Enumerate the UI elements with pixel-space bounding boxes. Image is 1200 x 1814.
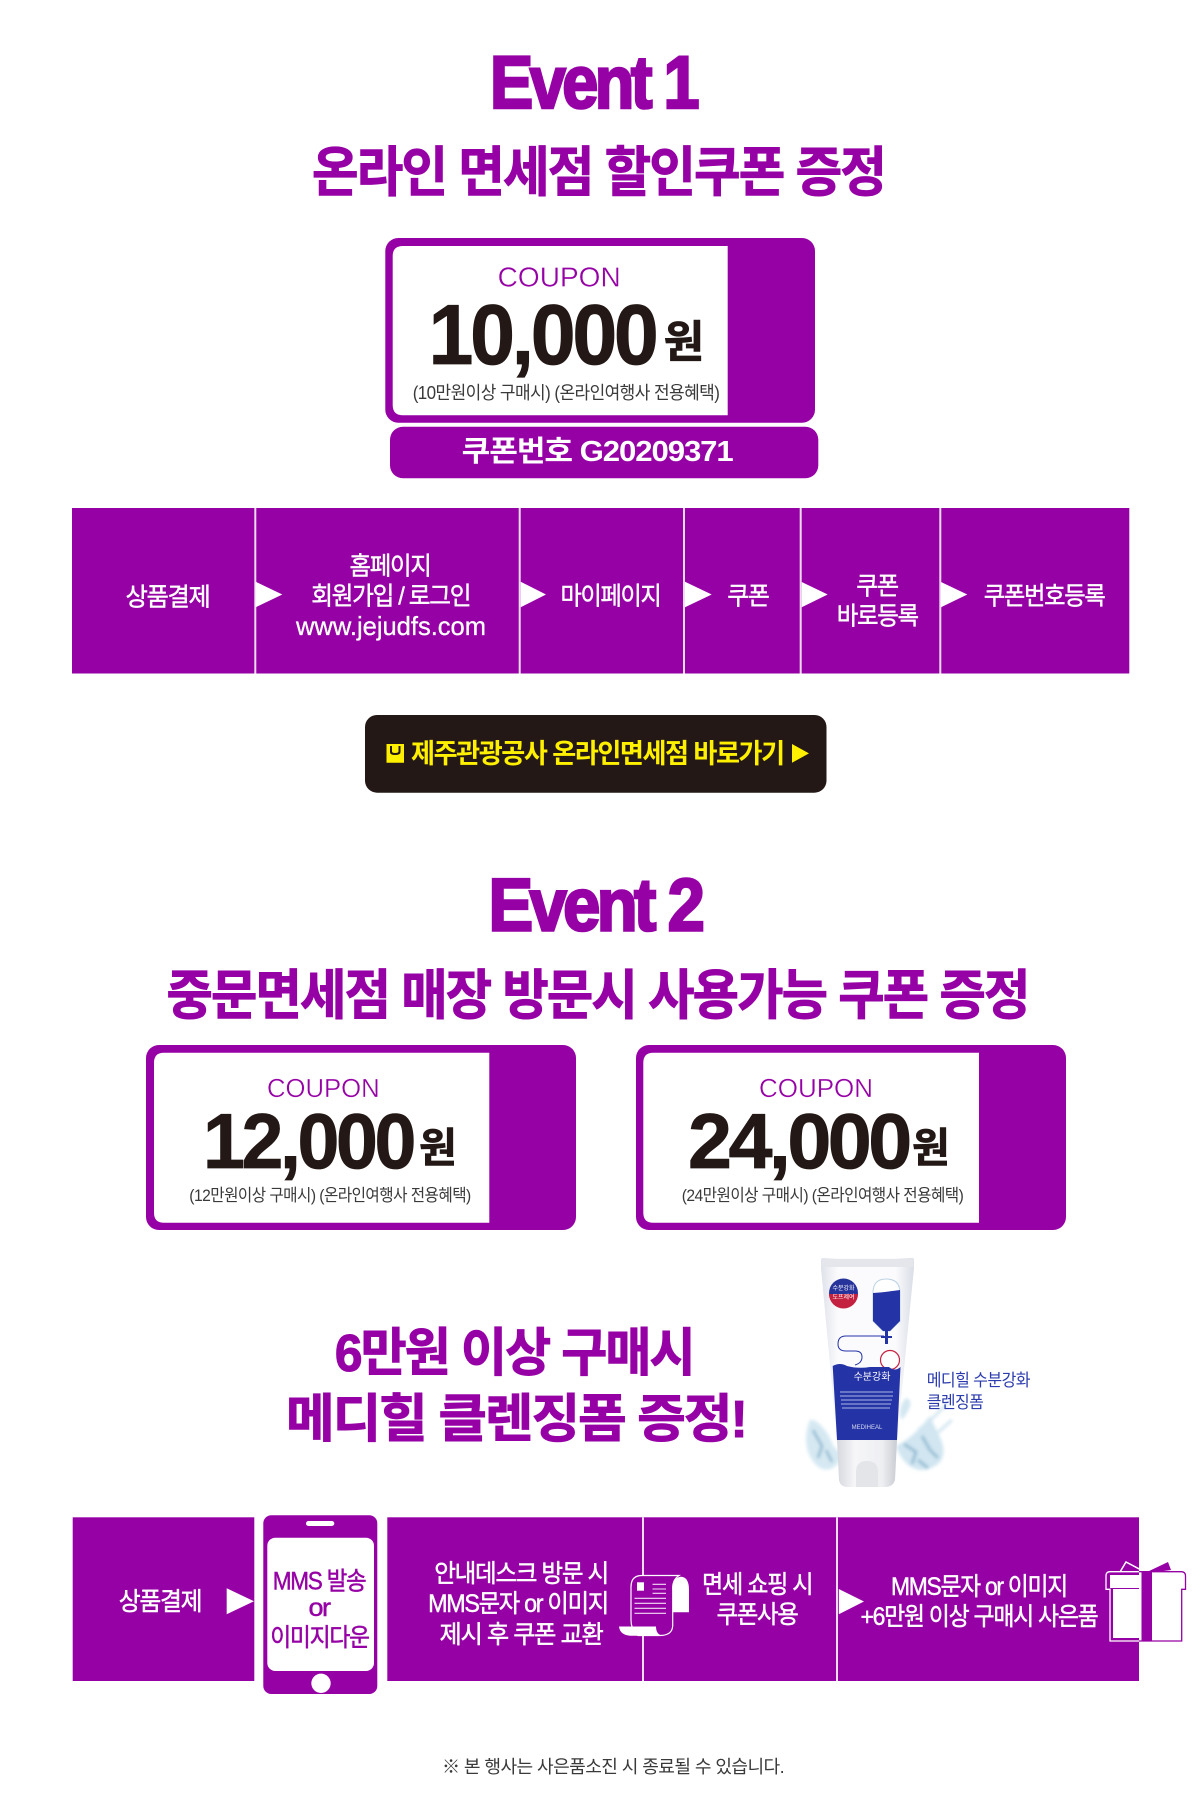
- icon: gift box: [1106, 1562, 1186, 1641]
- step panels: help desk, shopping, gift: [387, 1517, 1139, 1681]
- won unit: 원: [664, 318, 704, 367]
- step: shopping text: 면세 쇼핑 시: [702, 1571, 812, 1599]
- footnote: ※ 본 행사는 사은품소진 시 종료될 수 있습니다.: [442, 1757, 784, 1777]
- step: homepage login: 회원가입 / 로그인: [311, 582, 470, 610]
- arrow: [941, 582, 967, 607]
- coupon condition: (12만원이상 구매시) (온라인여행사 전용혜택): [189, 1186, 471, 1205]
- coupon amount: 12,000: [203, 1097, 414, 1185]
- step panel: payment: [73, 1517, 254, 1681]
- tube body: [821, 1258, 914, 1440]
- step: direct registration: 쿠폰: [856, 572, 898, 600]
- icon: phone with MMS: or: [308, 1594, 331, 1622]
- step: shopping text: 쿠폰사용: [716, 1601, 798, 1629]
- panel: 24,000 won coupon: [636, 1045, 1066, 1230]
- icon: play arrow: [792, 744, 809, 763]
- step: coupon: 쿠폰: [727, 582, 769, 610]
- step: gift text: [860, 1573, 1098, 1631]
- coupon label: COUPON: [759, 1073, 873, 1103]
- step: direct registration: 바로등록: [837, 602, 918, 630]
- step: gift text: MMS문자 or 이미지: [891, 1573, 1067, 1601]
- water splash: [806, 1398, 952, 1470]
- step: homepage login: 홈페이지: [350, 552, 430, 580]
- step panel: payment: 상품결제: [119, 1588, 201, 1616]
- heading: Jungmun store coupon: 중문면세점 매장 방문시 사용가능 쿠폰 증정: [166, 966, 1028, 1026]
- step: payment: 상품결제: [126, 584, 210, 612]
- heading: Event 2: Event 2: [488, 864, 703, 947]
- product caption: 메디힐 수분강화: [927, 1371, 1031, 1390]
- icon: phone with MMS: 이미지다운: [270, 1624, 369, 1652]
- button: go to online duty free shop: [365, 715, 826, 793]
- stamp: [880, 1350, 900, 1370]
- gift ribbon: [1142, 1571, 1152, 1641]
- heading: Event 1: Event 1: [490, 41, 698, 124]
- step: help desk text: 제시 후 쿠폰 교환: [440, 1621, 604, 1649]
- blue label: [833, 1364, 900, 1440]
- product: Mediheal cleansing foam tube: MEDIHEAL: [852, 1425, 883, 1431]
- step: direct registration: [837, 572, 918, 630]
- panel: 10,000 won coupon: [385, 238, 815, 423]
- step: shopping text: [702, 1571, 812, 1629]
- product: Mediheal cleansing foam tube: 수분강화: [854, 1371, 890, 1383]
- icon: phone with MMS: MMS 발송: [273, 1568, 366, 1596]
- panel: 12,000 won coupon: [146, 1045, 576, 1230]
- product: Mediheal cleansing foam tube: [806, 1258, 952, 1487]
- button text: 제주관광공사 온라인면세점 바로가기: [411, 739, 784, 769]
- step: help desk text: [428, 1560, 608, 1649]
- arrow: [227, 1588, 254, 1614]
- coupon condition: (10만원이상 구매시) (온라인여행사 전용혜택): [413, 383, 719, 403]
- heading: online duty free coupon: 온라인 면세점 할인쿠폰 증정: [312, 143, 885, 203]
- step: my page: 마이페이지: [560, 582, 660, 610]
- coupon number bar: [390, 427, 818, 478]
- coupon label: COUPON: [267, 1073, 380, 1103]
- arrow: [802, 582, 828, 607]
- coupon condition: (24만원이상 구매시) (온라인여행사 전용혜택): [682, 1186, 963, 1205]
- flow: in-store coupon steps: [73, 1515, 1186, 1694]
- arrow: [685, 582, 712, 607]
- won unit: 원: [912, 1125, 950, 1171]
- headline: gift with purchase: 6만원 이상 구매시: [335, 1325, 694, 1383]
- step: homepage login: [295, 552, 486, 641]
- product: Mediheal cleansing foam tube: 수분강화: [832, 1284, 855, 1292]
- IV bag: [873, 1279, 900, 1331]
- product caption: 클렌징폼: [927, 1393, 983, 1412]
- headline: gift with purchase: [286, 1325, 746, 1449]
- badge: [829, 1278, 858, 1308]
- icon: phone with MMS: [263, 1515, 377, 1694]
- coupon number bar: 쿠폰번호 G20209371: [462, 435, 734, 468]
- coupon amount: 10,000: [428, 288, 656, 383]
- product: Mediheal cleansing foam tube: 도프제여: [832, 1293, 855, 1301]
- icon: receipt scroll: [619, 1576, 689, 1636]
- step: help desk text: 안내데스크 방문 시: [434, 1560, 608, 1588]
- tube cap: [837, 1440, 897, 1487]
- step: gift text: +6만원 이상 구매시 사은품: [860, 1603, 1098, 1631]
- arrow: [839, 1589, 864, 1614]
- step: enter coupon number: 쿠폰번호등록: [984, 582, 1105, 610]
- coupon amount: 24,000: [688, 1097, 910, 1185]
- coupon label: COUPON: [498, 262, 621, 292]
- arrow: [521, 582, 546, 607]
- product caption: [927, 1371, 1031, 1412]
- step: homepage login: www.jejudfs.com: [295, 611, 486, 641]
- arrow: [256, 582, 282, 607]
- step: help desk text: MMS문자 or 이미지: [428, 1590, 608, 1618]
- flow: online coupon steps: [72, 508, 1129, 674]
- headline: gift with purchase: 메디힐 클렌징폼 증정!: [286, 1391, 746, 1449]
- won unit: 원: [419, 1125, 457, 1171]
- icon: shopping bag: [386, 744, 404, 763]
